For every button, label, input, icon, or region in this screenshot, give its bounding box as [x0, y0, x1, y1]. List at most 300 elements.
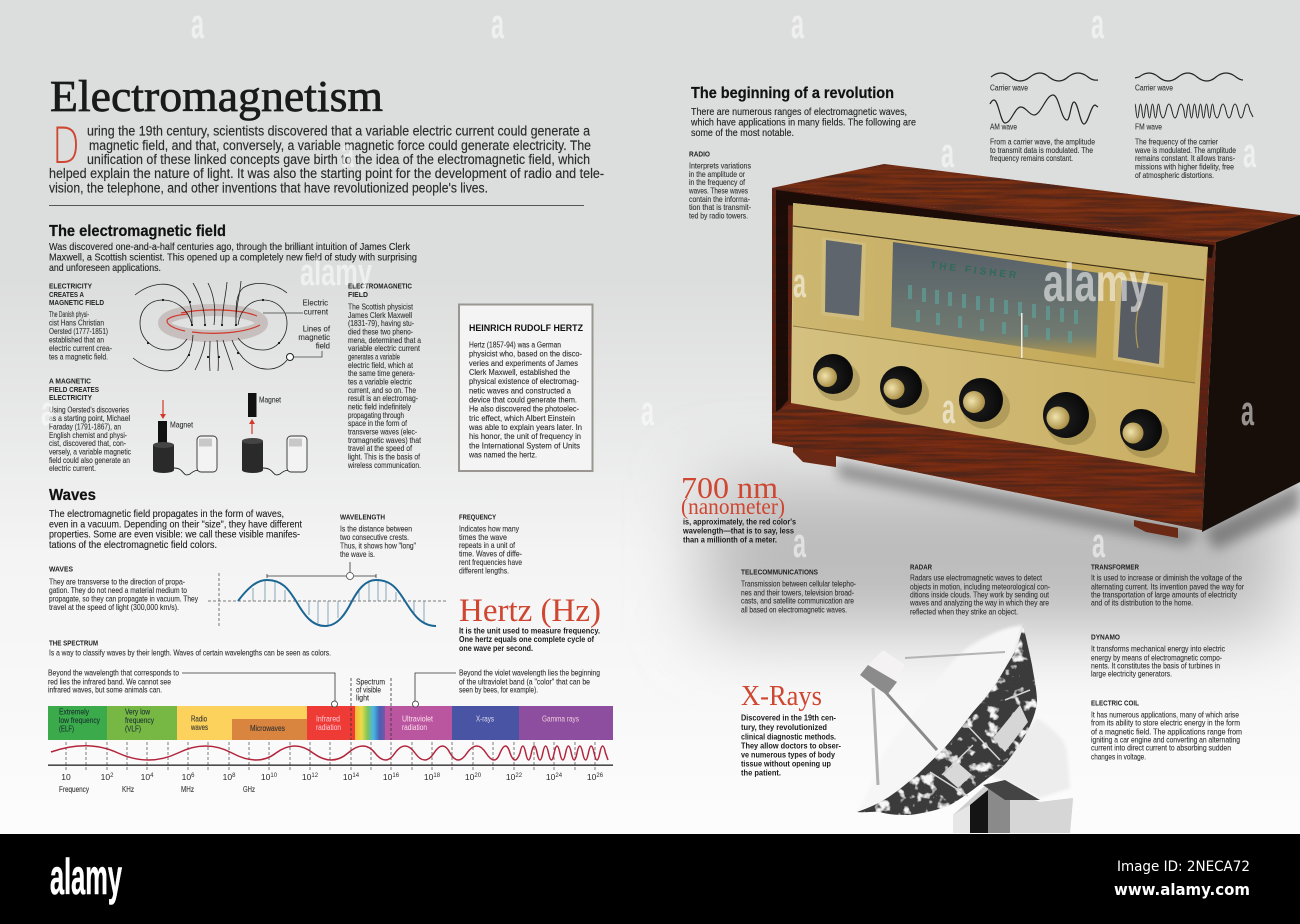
text: radar: objects in motion, including meteorological con- — [910, 582, 1050, 592]
image watermarks: a — [1243, 129, 1256, 176]
text: electricity creates a magnetic field: ELECTRICITY — [49, 284, 92, 290]
text: transformer: It is used to increase or diminish the voltage of the — [1091, 574, 1242, 582]
text: a magnetic field creates electricity: English chemist and physi- — [49, 431, 127, 440]
labels: electric current, lines of magnetic field — [298, 298, 331, 350]
feed horn and struts — [860, 650, 1005, 785]
text: wavelength: Thus, it shows how "long" — [340, 542, 416, 550]
chart: frequency scale with red wave: 14 — [352, 773, 360, 779]
text: electricity creates a magnetic field: MAGNETIC FIELD — [49, 300, 104, 307]
chart: frequency scale with red wave: 8 — [232, 773, 236, 779]
chart: FM wave — [1134, 73, 1253, 180]
callout: 700 nm: is, approximately, the red color's — [683, 516, 796, 526]
image watermarks: alamy — [300, 252, 372, 294]
text: electric coil: of a magnetic field. The applications range from — [1091, 728, 1242, 736]
cabinet top — [772, 164, 1300, 242]
text: telecommunications: nes and their towers, television broad- — [741, 588, 854, 598]
illustration: radar dish — [857, 625, 1073, 833]
tuning dial — [891, 242, 1099, 358]
text: transformer: and of its distribution to the home. — [1091, 598, 1193, 608]
note: ultraviolet: of the ultraviolet band (a "color" that can be — [459, 678, 590, 686]
band: VLF: Very low — [125, 708, 150, 716]
lower wood strip — [772, 403, 1203, 530]
text: electromagnetic field: travel at the speed of — [348, 444, 413, 453]
text: electromagnetic field: propagating through — [348, 411, 404, 420]
callout: Hertz unit — [459, 593, 601, 653]
chart: AM wave — [990, 73, 1098, 163]
chart: frequency scale with red wave: 10 — [61, 772, 71, 782]
text: electromagnetic field: space in the form of — [348, 419, 408, 428]
image watermarks: a — [941, 129, 954, 176]
text: a magnetic field creates electricity: field could also generate an — [49, 456, 130, 465]
labels: electric current, lines of magnetic field: Lines of — [303, 324, 331, 334]
band: microwaves — [232, 719, 307, 740]
text: electromagnetic field: ELECTROMAGNETIC — [348, 284, 412, 290]
chart: frequency scale with red wave: MHz — [181, 785, 194, 794]
text: dynamo: energy by means of electromagnetic compo- — [1091, 654, 1222, 662]
panel body: tric effect, which Albert Einstein — [469, 413, 575, 423]
text: frequency: rent frequencies have — [459, 558, 522, 567]
band: VLF: frequency — [125, 716, 154, 725]
text: waves: gation. They do not need a material medium to — [49, 586, 188, 595]
text: radio: in the frequency of — [689, 178, 746, 187]
callout: X-Rays: They allow doctors to obser- — [741, 740, 841, 750]
band: infrared — [307, 706, 355, 740]
text: radio: Interprets variations — [689, 162, 751, 170]
text: electricity creates a magnetic field: cist Hans Christian — [49, 318, 104, 328]
note: spectrum of visible light: Spectrum — [356, 678, 385, 686]
text: dynamo: large electricity generators. — [1091, 670, 1172, 678]
section: waves heading and intro — [49, 487, 302, 551]
text: a magnetic field creates electricity: Faraday (1791-1867), an — [49, 422, 121, 432]
band: radio waves — [177, 706, 307, 740]
chart: AM wave: AM wave — [990, 122, 1017, 132]
text: electromagnetic field: the same time genera- — [348, 369, 415, 378]
text: electric coil — [1091, 700, 1242, 762]
intro paragraph: magnetic field, and that, conversely, a variable magnetic force could generate electricity. The — [89, 138, 591, 153]
text: electromagnetic field: wireless communication. — [347, 461, 421, 470]
note: ultraviolet — [459, 668, 600, 694]
chart: frequency scale with red wave: 10 — [101, 772, 110, 782]
text: electricity creates a magnetic field: CREATES A — [49, 292, 84, 299]
chart: AM wave: Carrier wave — [990, 84, 1028, 92]
note: ultraviolet: Beyond the violet wavelength lies the beginning — [459, 668, 600, 678]
note: infrared: red lies the infrared band. We cannot see — [48, 678, 171, 686]
callout: X-Rays: tissue without opening up — [741, 758, 831, 768]
text: radar: Radars use electromagnetic waves to detect — [910, 574, 1043, 582]
text: waves: They are transverse to the direction of propa- — [49, 578, 185, 586]
band: x-rays: X-rays — [476, 714, 494, 724]
band: ELF: low frequency — [59, 716, 100, 725]
chart: frequency scale with red wave: 10 — [383, 772, 392, 782]
chart: frequency scale with red wave: 26 — [596, 773, 604, 779]
section: waves heading and intro: Waves — [49, 487, 96, 504]
knobs — [813, 354, 1169, 458]
section intro text — [49, 242, 417, 274]
panel body: the International System of Units — [469, 440, 580, 450]
chart: frequency scale with red wave: 10 — [182, 772, 191, 782]
text: electromagnetic field: (1831-79), having stu- — [348, 319, 414, 328]
band: ELF: (ELF) — [59, 724, 74, 734]
text: electromagnetic field — [347, 284, 422, 470]
text: frequency: different lengths. — [459, 566, 509, 576]
text: electric coil: current into direct current to absorbing sudden — [1091, 744, 1231, 752]
text: radio — [688, 152, 751, 220]
chart: frequency scale with red wave: 22 — [515, 773, 523, 779]
dish back lobe — [990, 718, 1070, 798]
text: wavelength: the wave is. — [340, 550, 375, 559]
band: gamma rays — [519, 706, 613, 740]
text: dynamo — [1091, 634, 1225, 678]
title: Electromagnetism — [50, 72, 383, 121]
panel body: physical existence of electromag- — [469, 376, 579, 386]
right coil and magnet — [242, 393, 307, 475]
callout: X-Rays: Discovered in the 19th cen- — [741, 712, 836, 722]
left coil and magnet — [153, 400, 217, 475]
callout: Hertz unit: Hertz (Hz) — [459, 593, 601, 629]
intro paragraph: unification of these linked concepts gave birth to the idea of the electromagnetic field, which — [87, 152, 590, 167]
text: radar: RADAR — [910, 564, 932, 572]
text: telecommunications: casts, and satellite communication are — [741, 596, 854, 606]
text: frequency: FREQUENCY — [459, 514, 496, 522]
chart: frequency scale with red wave: 20 — [474, 773, 482, 779]
intro paragraph: uring the 19th century, scientists discovered that a variable electric current could generate a — [87, 124, 591, 138]
text: waves — [49, 566, 198, 612]
text: electromagnetic field: tromagnetic waves) that — [348, 436, 422, 445]
callout: 700 nm: wavelength—that is to say, less — [682, 526, 794, 536]
callout: X-Rays: the patient. — [741, 768, 781, 778]
band: infrared: radiation — [316, 723, 341, 732]
text: telecommunications — [741, 570, 856, 614]
text: radio: in the amplitude or — [689, 170, 745, 179]
chart: AM wave: to transmit data is modulated. The — [990, 146, 1093, 155]
footer bar — [0, 834, 1300, 924]
callout: Hertz unit: one wave per second. — [459, 643, 533, 653]
band: ultraviolet — [385, 706, 452, 740]
text: a magnetic field creates electricity: Using Oersted's discoveries — [49, 406, 129, 414]
section: waves heading and intro: tations of the electromagnetic field colors. — [49, 540, 217, 551]
text: radio: tion that is transmit- — [689, 203, 751, 212]
cabinet front — [772, 188, 1216, 530]
intro paragraph: helped explain the nature of light. It was also the starting point for the development of radio and tele- — [49, 166, 604, 181]
text: frequency: times the wave — [459, 533, 507, 542]
text: electricity creates a magnetic field: tes a magnetic field. — [49, 352, 108, 362]
section: the electromagnetic field — [49, 223, 417, 274]
text: radar: ditions inside clouds. They work by sending out — [910, 590, 1050, 600]
text: dynamo: nents. It constitutes the basis of turbines in — [1091, 662, 1220, 670]
image watermarks: a — [41, 387, 54, 434]
text: electric coil: igniting a car engine and converting an alternating — [1091, 736, 1240, 744]
chart: frequency scale with red wave: 10 — [223, 772, 232, 782]
text: telecommunications: Transmission between cellular telepho- — [741, 580, 856, 588]
feet — [793, 440, 836, 467]
chart: frequency scale with red wave: 24 — [555, 773, 563, 779]
drop cap: D — [52, 117, 80, 175]
lattice panels — [930, 690, 1030, 796]
text: electricity creates a magnetic field: Oersted (1777-1851) — [49, 327, 108, 336]
chart: sine wave — [208, 562, 448, 628]
chart: frequency scale with red wave: 10 — [261, 772, 270, 782]
panel body: physicist who, based on the disco- — [469, 349, 582, 359]
text: electromagnetic field: generates a variable — [348, 352, 400, 362]
image watermarks: a — [1241, 387, 1254, 434]
text: the spectrum — [49, 640, 331, 658]
text: a magnetic field creates electricity: as a starting point, Michael — [49, 414, 130, 423]
section: the beginning of a revolution: There are numerous ranges of electromagnetic waves, — [691, 107, 907, 118]
text: waves: WAVES — [49, 566, 73, 574]
image watermarks: alamy — [1043, 253, 1150, 313]
labels: electric current, lines of magnetic field: magnetic — [298, 333, 330, 342]
labels: electric current, lines of magnetic field: current — [304, 308, 329, 316]
text: telecommunications: all based on electromagnetic waves. — [741, 606, 847, 614]
text: the spectrum: Is a way to classify waves by their length. Waves of certain wavelengths can be seen as colors. — [49, 648, 331, 658]
lattice rim — [857, 625, 1037, 815]
text: a magnetic field creates electricity: cist, discovered that, con- — [49, 439, 126, 448]
dish face — [857, 625, 1023, 812]
panel body: He also discovered the photoelec- — [469, 404, 579, 414]
tuning meter — [1113, 276, 1168, 368]
band: radio waves: waves — [190, 723, 208, 732]
image watermarks: a — [1091, 0, 1104, 47]
image watermarks: a — [793, 259, 806, 306]
callout: X-Rays: clinical diagnostic methods. — [741, 732, 836, 742]
band: ELF — [48, 706, 107, 740]
text: transformer: the transportation of large amounts of electricity — [1091, 590, 1237, 600]
text: electricity creates a magnetic field: electric current crea- — [49, 344, 112, 353]
chart: frequency scale with red wave: 10 — [343, 772, 352, 782]
text: a magnetic field creates electricity: ELECTRICITY — [49, 395, 92, 402]
section intro text: Was discovered one-and-a-half centuries ago, through the brilliant intuition of James Clerk — [49, 242, 411, 253]
text: electromagnetic field: electric field, which at — [348, 361, 414, 370]
gold faceplate — [791, 203, 1208, 473]
text: electric coil: ELECTRIC COIL — [1091, 700, 1140, 708]
text: transformer: alternating current. Its invention paved the way for — [1091, 582, 1244, 592]
panel body: was named the hertz. — [468, 450, 537, 460]
intro paragraph: vision, the telephone, and other inventions that have revolutionized people's lives. — [49, 180, 488, 196]
callout: X-Rays: ve numerous types of body — [741, 750, 835, 760]
text: frequency: time. Waves of diffe- — [459, 550, 522, 558]
text: a magnetic field creates electricity — [49, 378, 131, 473]
note: ultraviolet: seen by bees, for example). — [459, 686, 538, 694]
chart: FM wave: of atmospheric distortions. — [1135, 171, 1214, 180]
chart: FM wave: missions with higher fidelity, free — [1135, 162, 1234, 172]
text: radar: reflected when they strike an object. — [910, 608, 1018, 616]
image watermarks — [41, 0, 1256, 566]
chart: frequency scale with red wave: GHz — [243, 785, 255, 794]
callout lines — [182, 673, 456, 740]
callout: 700 nm: 700 nm — [681, 470, 778, 505]
text: electromagnetic field: mena, determined that a — [348, 336, 422, 345]
labels: electric current, lines of magnetic field: field — [316, 342, 330, 350]
image watermarks: a — [793, 519, 806, 566]
chart: frequency scale with red wave: 10 — [546, 772, 555, 782]
text: waves: travel at the speed of light (300,000 km/s). — [49, 603, 179, 612]
text: frequency: Indicates how many — [459, 524, 519, 534]
text: electricity creates a magnetic field: established that an — [49, 336, 104, 344]
text: electromagnetic field: variable electric current — [348, 344, 421, 353]
text: dynamo: It transforms mechanical energy into electric — [1091, 644, 1225, 654]
text: electromagnetic field: transverse waves (elec- — [348, 428, 417, 436]
callout: 700 nm: than a millionth of a meter. — [683, 534, 777, 544]
chart: electromagnetic spectrum bar — [48, 706, 613, 740]
note: spectrum of visible light: of visible — [356, 686, 381, 694]
chart: frequency scale with red wave: 10 — [465, 772, 474, 782]
chart: FM wave: wave is modulated. The amplitude — [1134, 146, 1236, 155]
section intro text: Maxwell, a Scottish scientist. This opened up a completely new field of study with surprising — [49, 252, 417, 264]
image watermarks: a — [641, 387, 654, 434]
text: radar — [909, 564, 1050, 616]
band: microwaves: Microwaves — [250, 724, 285, 733]
right coil and magnet: Magnet — [259, 396, 282, 404]
note: spectrum of visible light — [356, 678, 385, 702]
note: infrared: infrared waves, but some animals can. — [48, 686, 162, 694]
text: electric coil: from its ability to store electric energy in the form — [1091, 718, 1240, 728]
diagram: magnets and coils — [153, 393, 307, 475]
text: electricity creates a magnetic field — [49, 284, 112, 362]
chart: frequency scale with red wave: 18 — [433, 773, 441, 779]
chart: AM wave: frequency remains constant. — [990, 154, 1073, 163]
text: electric coil: It has numerous applications, many of which arise — [1091, 710, 1239, 720]
image watermarks: a — [341, 129, 354, 176]
text: a magnetic field creates electricity: FIELD CREATES — [49, 387, 99, 394]
text: a magnetic field creates electricity: A MAGNETIC — [49, 378, 91, 386]
text: wavelength: Is the distance between — [340, 524, 412, 534]
text: dynamo: DYNAMO — [1091, 634, 1121, 642]
image watermarks: a — [942, 385, 955, 432]
section: waves heading and intro: properties. Some are even visible: we call these visible manifes- — [49, 530, 300, 540]
callout: X-Rays — [741, 681, 841, 778]
section: the beginning of a revolution — [690, 85, 916, 139]
image watermarks: a — [1092, 519, 1105, 566]
text: the spectrum: THE SPECTRUM — [49, 640, 98, 648]
text: electromagnetic field: result is an electromag- — [348, 394, 418, 403]
pedestal — [953, 780, 1073, 833]
left coil and magnet: Magnet — [170, 420, 194, 430]
text: radio: waves. These waves — [688, 186, 748, 196]
text: transformer — [1091, 564, 1244, 608]
text: electromagnetic field: The Scottish physicist — [348, 302, 414, 312]
chart: frequency scale with red wave: 10 — [141, 772, 150, 782]
image watermarks: a — [791, 0, 804, 47]
chart: FM wave: Carrier wave — [1135, 84, 1173, 92]
footer logo: alamy — [50, 849, 122, 905]
cabinet side — [1202, 215, 1300, 532]
illustration: vintage radio — [772, 164, 1300, 538]
chart: frequency scale with red wave: 2 — [110, 773, 114, 779]
callout: X-Rays: tury, they revolutionized — [741, 722, 827, 732]
chart: AM wave: From a carrier wave, the amplitude — [990, 138, 1095, 146]
text: telecommunications: TELECOMMUNICATIONS — [741, 570, 818, 576]
band: radio waves: Radio — [191, 714, 208, 724]
chart: frequency scale with red wave: 16 — [392, 773, 400, 779]
text: electromagnetic field: current, and so on. The — [348, 386, 416, 395]
panel body: his honor, the unit of frequency in — [469, 431, 581, 441]
text: electromagnetic field: died these two pheno- — [348, 328, 413, 336]
band: infrared: Infrared — [316, 714, 340, 724]
chart: FM wave: The frequency of the carrier — [1135, 138, 1218, 146]
text: waves: propagate, so they can propagate in vacuum. They — [49, 594, 198, 604]
image watermarks: a — [191, 0, 204, 47]
chart: frequency scale with red wave: 12 — [311, 773, 319, 779]
band: visible light — [355, 706, 385, 740]
footer image id: Image ID: 2NECA72 — [1117, 859, 1250, 875]
text: electromagnetic field: James Clerk Maxwell — [348, 311, 412, 320]
band: ELF: Extremely — [59, 708, 89, 716]
panel body: Hertz (1857-94) was a German — [469, 340, 561, 350]
panel heading: HEINRICH RUDOLF HERTZ — [469, 323, 583, 334]
text: radar: waves and analyzing the way in which they are — [909, 598, 1049, 608]
image watermarks: a — [491, 0, 504, 47]
band: ultraviolet: Ultraviolet — [402, 714, 434, 724]
note: infrared — [48, 668, 180, 694]
text: electricity creates a magnetic field: The Danish physi- — [49, 310, 89, 319]
chart: frequency scale with red wave: Frequency — [59, 785, 89, 794]
panel body: was able to explain years later. In — [468, 422, 582, 432]
text: wavelength — [340, 514, 416, 559]
text: a magnetic field creates electricity: versely, a variable magnetic — [49, 448, 131, 456]
panel body: device that could generate them. — [469, 394, 577, 404]
section: the beginning of a revolution: some of the most notable. — [691, 128, 794, 139]
text: electromagnetic field: FIELD — [348, 292, 368, 299]
intro paragraph — [49, 117, 604, 196]
text: radio: ted by radio towers. — [689, 212, 748, 220]
text: wavelength: WAVELENGTH — [340, 514, 385, 522]
text: frequency — [459, 514, 522, 576]
band: ultraviolet: radiation — [402, 723, 427, 732]
text: wavelength: two consecutive crests. — [340, 533, 409, 542]
text: electromagnetic field: tes a variable electric — [348, 378, 412, 386]
footer url: www.alamy.com — [1114, 880, 1250, 899]
panel: Heinrich Rudolf Hertz — [459, 304, 592, 471]
text: transformer: TRANSFORMER — [1091, 564, 1139, 572]
band selector window — [821, 237, 866, 321]
band: VLF: (VLF) — [125, 724, 141, 734]
callout: 700 nm — [681, 470, 796, 544]
chart: frequency scale with red wave: 10 — [587, 772, 596, 782]
chart: frequency scale with red wave: KHz — [122, 785, 134, 794]
section: waves heading and intro: even in a vacuum. Depending on their "size", they have different — [49, 520, 302, 530]
labels: electric current, lines of magnetic field: Electric — [302, 298, 328, 308]
panel body — [468, 340, 582, 460]
chart: frequency scale with red wave: 10 — [302, 772, 311, 782]
text: electromagnetic field: netic field indefinitely — [348, 402, 411, 412]
text: radio: RADIO — [689, 152, 711, 158]
section: the beginning of a revolution: The beginning of a revolution — [691, 85, 894, 102]
text: electromagnetic field: light. This is the basis of — [348, 452, 421, 462]
callout: Hertz unit: It is the unit used to measure frequency. — [459, 626, 600, 636]
section intro text: and unforeseen applications. — [49, 263, 161, 274]
callout: 700 nm: (nanometer) — [681, 494, 785, 519]
chart: frequency scale with red wave: 4 — [150, 773, 154, 779]
chart: frequency scale with red wave: 6 — [191, 773, 195, 779]
text: a magnetic field creates electricity: electric current. — [49, 464, 96, 473]
note: infrared: Beyond the wavelength that corresponds to — [48, 668, 180, 678]
text: radio: contain the informa- — [689, 195, 750, 204]
chart: frequency scale with red wave — [48, 742, 613, 794]
callout: Hertz unit: One hertz equals one complete cycle of — [459, 634, 594, 644]
panel body: netic waves and constructed a — [469, 385, 571, 395]
chart: frequency scale with red wave: 10 — [424, 772, 433, 782]
section: the beginning of a revolution: which have applications in many fields. The following are — [690, 118, 916, 128]
chart: frequency scale with red wave: 10 — [270, 773, 278, 779]
band: gamma rays: Gamma rays — [542, 714, 579, 724]
note: spectrum of visible light: light — [356, 694, 370, 702]
band: VLF — [107, 706, 177, 740]
text: electric coil: changes in voltage. — [1091, 752, 1146, 762]
section: waves heading and intro: The electromagnetic field propagates in the form of waves, — [49, 509, 284, 520]
band: x-rays — [452, 706, 519, 740]
panel body: Clerk Maxwell, established the — [469, 367, 570, 377]
chart: frequency scale with red wave: 10 — [506, 772, 515, 782]
